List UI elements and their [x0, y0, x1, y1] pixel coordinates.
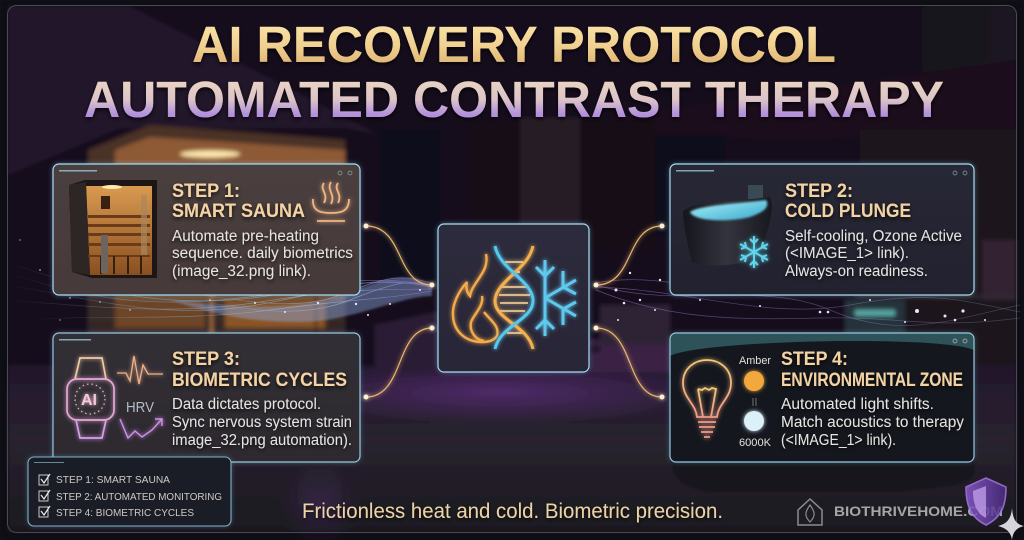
icon: light bulb [683, 360, 731, 437]
icon: DNA helix [495, 246, 533, 349]
step 1 text: (image_32.png link). [172, 263, 311, 280]
step 3 text: Sync nervous system strain [172, 414, 352, 431]
icon: sparkle [998, 508, 1024, 540]
step 4 text: STEP 4: [781, 349, 848, 370]
connector lines [364, 224, 664, 400]
step 1 text: STEP 1: [172, 181, 240, 202]
icon: AI smartwatch [67, 358, 114, 438]
step 4 text: Match acoustics to therapy [781, 414, 964, 431]
step 2 text [785, 181, 962, 280]
step 1 text: Automate pre-heating [172, 228, 319, 245]
title: AI RECOVERY PROTOCOL [192, 16, 836, 73]
icon: cold plunge tub [683, 185, 772, 265]
sauna backdrop [88, 125, 345, 395]
step 2 text: Always-on readiness. [785, 263, 928, 280]
Amber and 6000K swatches: Amber [739, 355, 771, 367]
panel: central heat and cold DNA icon [438, 224, 589, 372]
logo: biothrivehome: BIOTHRIVEHOME.COM [834, 503, 1003, 519]
lounge furniture [375, 305, 470, 370]
Amber and 6000K swatches [739, 355, 772, 449]
step 2 text: (<IMAGE_1> link). [785, 245, 909, 262]
step 4 text [781, 349, 964, 449]
icon: small snowflake [740, 236, 768, 268]
panel: step 1 smart sauna [53, 164, 360, 295]
step 2 text: STEP 2: [785, 181, 853, 202]
icon: heart pulse [117, 356, 163, 384]
step 3 text: BIOMETRIC CYCLES [172, 370, 347, 391]
panel: checklist [28, 457, 231, 526]
step 2 text: COLD PLUNGE [785, 201, 911, 222]
step 4 text: (<IMAGE_1> link). [781, 432, 896, 449]
particle waves [5, 239, 1020, 337]
sauna photo [69, 180, 157, 278]
tagline: Frictionless heat and cold. Biometric precision. [302, 500, 723, 523]
step 4 text: Automated light shifts. [781, 396, 934, 413]
title: AUTOMATED CONTRAST THERAPY [84, 71, 944, 128]
logo: biothrivehome [798, 499, 1003, 525]
step 4 text: ENVIRONMENTAL ZONE [781, 370, 963, 391]
checklist row 3: STEP 4: BIOMETRIC CYCLES [56, 507, 194, 519]
icon: steam bowl [313, 182, 349, 221]
checklist row 2: STEP 2: AUTOMATED MONITORING [56, 491, 222, 503]
step 1 text: sequence. daily biometrics [172, 245, 353, 262]
icon: shield badge [966, 478, 1006, 525]
step 1 text: SMART SAUNA [172, 201, 305, 222]
icon: large snowflake [536, 260, 576, 336]
step 2 text: Self-cooling, Ozone Active [785, 228, 962, 245]
coffee machine [982, 240, 1016, 300]
hot tub object [845, 300, 905, 336]
step 3 text: image_32.png automation). [172, 432, 352, 449]
panel: step 2 cold plunge [670, 164, 974, 295]
HRV label: HRV [126, 399, 154, 416]
icon: flame [453, 254, 498, 342]
Amber and 6000K swatches: 6000K [739, 437, 772, 449]
step 1 text [172, 181, 353, 280]
title [84, 16, 944, 128]
icon: trend arrow [120, 419, 162, 438]
panel: step 4 environmental zone [670, 333, 974, 462]
step 3 text [172, 349, 352, 449]
step 3 text: Data dictates protocol. [172, 396, 321, 413]
icon: AI smartwatch: AI [81, 392, 97, 409]
checklist row 1: STEP 1: SMART SAUNA [56, 474, 170, 486]
panel: step 3 biometric cycles [53, 333, 360, 462]
step 3 text: STEP 3: [172, 349, 240, 370]
